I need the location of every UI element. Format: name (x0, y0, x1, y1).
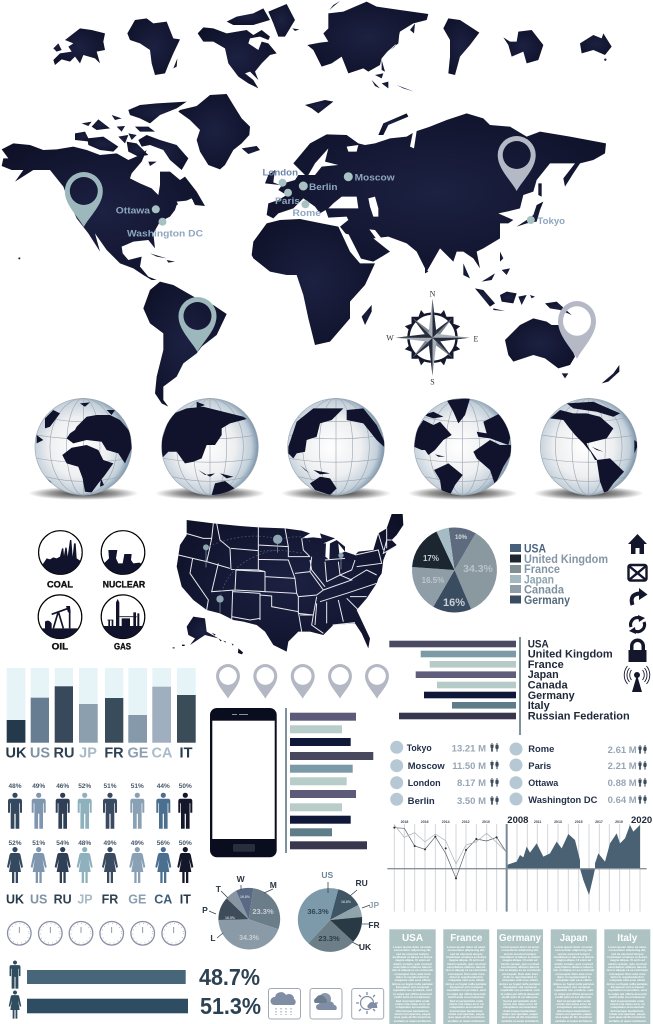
people pictogram: women: 51% (32, 840, 45, 847)
continent: Australia (580, 33, 612, 61)
people pictogram: women: 49% (131, 840, 144, 847)
continent: Africa (127, 18, 180, 75)
map pin: Russia (498, 136, 536, 191)
horizontal bar chart: countries: Canada (528, 680, 569, 692)
map pin: North America (65, 172, 103, 227)
city labels on map: Berlin (309, 182, 338, 192)
label: oil: OIL (52, 642, 68, 652)
pie chart: categories: P (202, 905, 208, 915)
icon: antenna (624, 666, 650, 692)
horizontal bar chart: countries: Germany (528, 690, 576, 702)
city population table: 0.88 M (608, 778, 637, 789)
weather: rain (268, 988, 300, 1019)
pie chart: countries small: JP (369, 900, 380, 910)
label: nuclear: NUCLEAR (103, 579, 145, 590)
city labels on map: Washington DC (127, 229, 204, 239)
horizontal bar chart: countries (389, 637, 630, 735)
country labels row 2: CA (154, 892, 172, 906)
time series chart: 2012 (462, 820, 470, 824)
info columns: Italy (617, 933, 638, 944)
city population table: Paris (528, 761, 551, 772)
globe row (28, 398, 644, 500)
pie legend: France (524, 564, 560, 576)
country bars with labels: RU (54, 746, 74, 762)
pie chart: countries small: 23.3% (318, 934, 340, 943)
continent: Asia (307, 1, 428, 92)
horizontal bar chart: countries: United Kingdom (528, 648, 613, 660)
city labels on map: Tokyo (538, 216, 566, 226)
continent: North America (198, 4, 299, 88)
label: coal: COAL (47, 579, 73, 590)
pie chart: categories: 16.8% (240, 895, 251, 899)
city population table: Rome (528, 744, 554, 755)
weather: night cloud (310, 988, 342, 1019)
pie chart: countries (412, 527, 497, 612)
icon: oil (37, 595, 85, 642)
city labels on map: Paris (275, 196, 300, 206)
people pictogram: men: 48% (8, 783, 22, 790)
icon: nuclear (100, 530, 146, 575)
continent: South America (443, 18, 479, 75)
compass rose: E (474, 335, 479, 344)
continent: Antarctica (503, 30, 543, 63)
time series chart: 2015 (575, 820, 583, 824)
people pictogram: women: 48% (78, 840, 91, 847)
icon: gas (101, 595, 145, 640)
country bars with labels: UK (6, 746, 27, 762)
USA map (173, 514, 403, 654)
pie chart: countries small: FR (368, 920, 380, 930)
info columns: Germany (499, 933, 541, 944)
pie legend: USA (524, 544, 546, 556)
city population table: 2.21 M (608, 761, 637, 772)
city population table: London (408, 778, 441, 789)
people pictogram: men: 44% (157, 783, 170, 790)
city population table: 2.61 M (608, 745, 637, 756)
globe: Atlantic (408, 398, 518, 500)
info columns: France (450, 933, 483, 944)
people pictogram: men: 52% (78, 783, 91, 790)
pie chart: countries: 17% (423, 554, 439, 563)
gender comparison: male: 48.7% (199, 964, 260, 990)
icon: refresh (629, 615, 645, 634)
city population table: Berlin (408, 796, 435, 807)
globe: Asia (155, 398, 265, 500)
people pictogram: women: 50% (179, 840, 192, 847)
time series chart: 2016 (421, 820, 429, 824)
icon column (624, 534, 650, 692)
time series chart: 2008 (507, 815, 528, 826)
city labels on map: London (262, 168, 298, 178)
people pictogram: men: 51% (131, 783, 144, 790)
country labels row 2 (6, 892, 191, 906)
pie chart: categories: 16.5% (225, 916, 236, 920)
country bars with labels: US (30, 746, 50, 762)
pie chart: categories: M (270, 880, 277, 890)
info columns (389, 929, 650, 1024)
pie chart: categories: 23.3% (252, 907, 274, 916)
horizontal bar chart: countries: Japan (528, 669, 559, 681)
country labels row 2: UK (6, 892, 24, 906)
city labels on map: Ottawa (116, 205, 151, 215)
people pictogram: women: 54% (56, 840, 69, 847)
city population table: Moscow (408, 761, 445, 772)
people pictogram: men: 50% (179, 783, 192, 790)
continent: Europe (53, 28, 105, 65)
energy icons (37, 531, 147, 652)
people pictogram: men: 49% (32, 783, 45, 790)
globe: Pacific (281, 398, 391, 500)
city population table (390, 741, 647, 807)
compass rose: N (430, 290, 436, 299)
map west: Americas (2, 94, 260, 407)
city labels on map (116, 168, 566, 239)
label: gas: GAS (114, 642, 131, 652)
pie legend: United Kingdom (524, 554, 608, 566)
pie chart: countries: 16.5% (422, 576, 444, 585)
gender comparison: male (10, 960, 260, 990)
time series chart: 2011 (534, 820, 542, 824)
city labels on map: Moscow (355, 173, 396, 183)
icon: redo arrow (632, 588, 648, 605)
pie chart: countries: 34.3% (463, 563, 494, 575)
icon: home (628, 534, 647, 554)
time series chart: 2017 (595, 820, 603, 824)
pie chart: countries small: 16.8% (341, 900, 352, 904)
time series chart (387, 815, 652, 912)
pie legend: Canada (524, 584, 565, 596)
info columns: USA (402, 933, 423, 944)
map pin: Australia (558, 301, 596, 359)
pie legend: Germany (524, 595, 571, 607)
people pictogram: women: 56% (157, 840, 170, 847)
info columns: Japan (560, 933, 588, 944)
country bars with labels: GE (128, 746, 149, 762)
pie chart: countries small: RU (356, 878, 368, 888)
map pin: South America (178, 297, 216, 352)
people pictogram: women (7, 840, 193, 883)
time series chart: 2019 (615, 820, 623, 824)
icon: mail (628, 565, 646, 580)
compass rose: S (430, 378, 435, 387)
city population table: Tokyo (407, 743, 432, 754)
time series chart: 2013 (554, 820, 562, 824)
pie chart: countries small: UK (359, 942, 372, 952)
pie chart: categories: 34.3% (239, 935, 260, 942)
horizontal bar chart: countries: Russian Federation (528, 710, 630, 722)
pie chart: categories: T (216, 884, 222, 894)
continents strip (53, 1, 612, 92)
pin row (216, 664, 389, 699)
people pictogram: women: 49% (103, 840, 117, 847)
country bars with labels: JP (79, 746, 97, 762)
city population table: 8.17 M (457, 778, 486, 789)
people pictogram: women: 52% (8, 840, 22, 847)
pie chart: countries: 10% (455, 535, 468, 541)
icon: lock (628, 639, 646, 662)
city population table: 3.50 M (457, 796, 486, 807)
pie chart: categories (202, 874, 280, 949)
globe: Americas (534, 398, 644, 500)
pie chart: countries small: US (321, 870, 334, 880)
weather icons (268, 988, 384, 1019)
gender comparison: female: 51.3% (200, 993, 261, 1019)
city labels on map: Rome (292, 208, 321, 218)
pie chart: categories: L (210, 933, 216, 943)
weather: sun (352, 988, 384, 1019)
people pictogram: men: 51% (103, 783, 117, 790)
clocks (7, 922, 185, 945)
icon: coal (38, 530, 83, 575)
pie legend (510, 544, 608, 607)
country labels row 2: IT (180, 892, 191, 906)
horizontal bar chart: countries: USA (528, 638, 549, 650)
country bars with labels (6, 668, 196, 762)
country labels row 2: GE (128, 892, 146, 906)
pie chart: categories: W (237, 874, 246, 884)
globe: Africa and Europe (28, 398, 138, 500)
horizontal bar chart: countries: France (528, 659, 564, 671)
city population table: 0.64 M (608, 795, 637, 806)
country bars with labels: IT (180, 746, 193, 762)
city population table: 13.21 M (452, 744, 486, 754)
phone side bar chart (285, 708, 373, 853)
country labels row 2: JP (77, 892, 93, 906)
time series chart: 2010 (482, 820, 490, 824)
pie chart: countries small (298, 870, 380, 952)
country labels row 2: FR (102, 892, 118, 906)
pie chart: countries small: 36.3% (307, 907, 329, 916)
compass rose (386, 290, 479, 387)
city population table: 11.50 M (452, 761, 486, 772)
phone (210, 708, 277, 857)
city population table: Ottawa (528, 778, 559, 789)
pie legend: Japan (524, 574, 554, 586)
compass rose: W (386, 334, 394, 343)
country bars with labels: CA (152, 746, 173, 762)
world map (2, 94, 619, 407)
map east: Eurasia, Africa, Australia (252, 100, 619, 383)
gender comparison: female (9, 990, 261, 1019)
city population table: Washington DC (528, 795, 597, 806)
horizontal bar chart: countries: Italy (528, 700, 551, 712)
people pictogram: men: 46% (56, 783, 69, 790)
pie chart: countries: 16% (443, 597, 465, 609)
time series chart: 2014 (442, 820, 450, 824)
people pictogram: men (8, 783, 192, 829)
country labels row 2: US (30, 892, 47, 906)
country labels row 2: RU (54, 892, 72, 906)
country bars with labels: FR (104, 746, 124, 762)
time series chart: 2020 (631, 815, 652, 826)
time series chart: 2018 (401, 820, 408, 824)
